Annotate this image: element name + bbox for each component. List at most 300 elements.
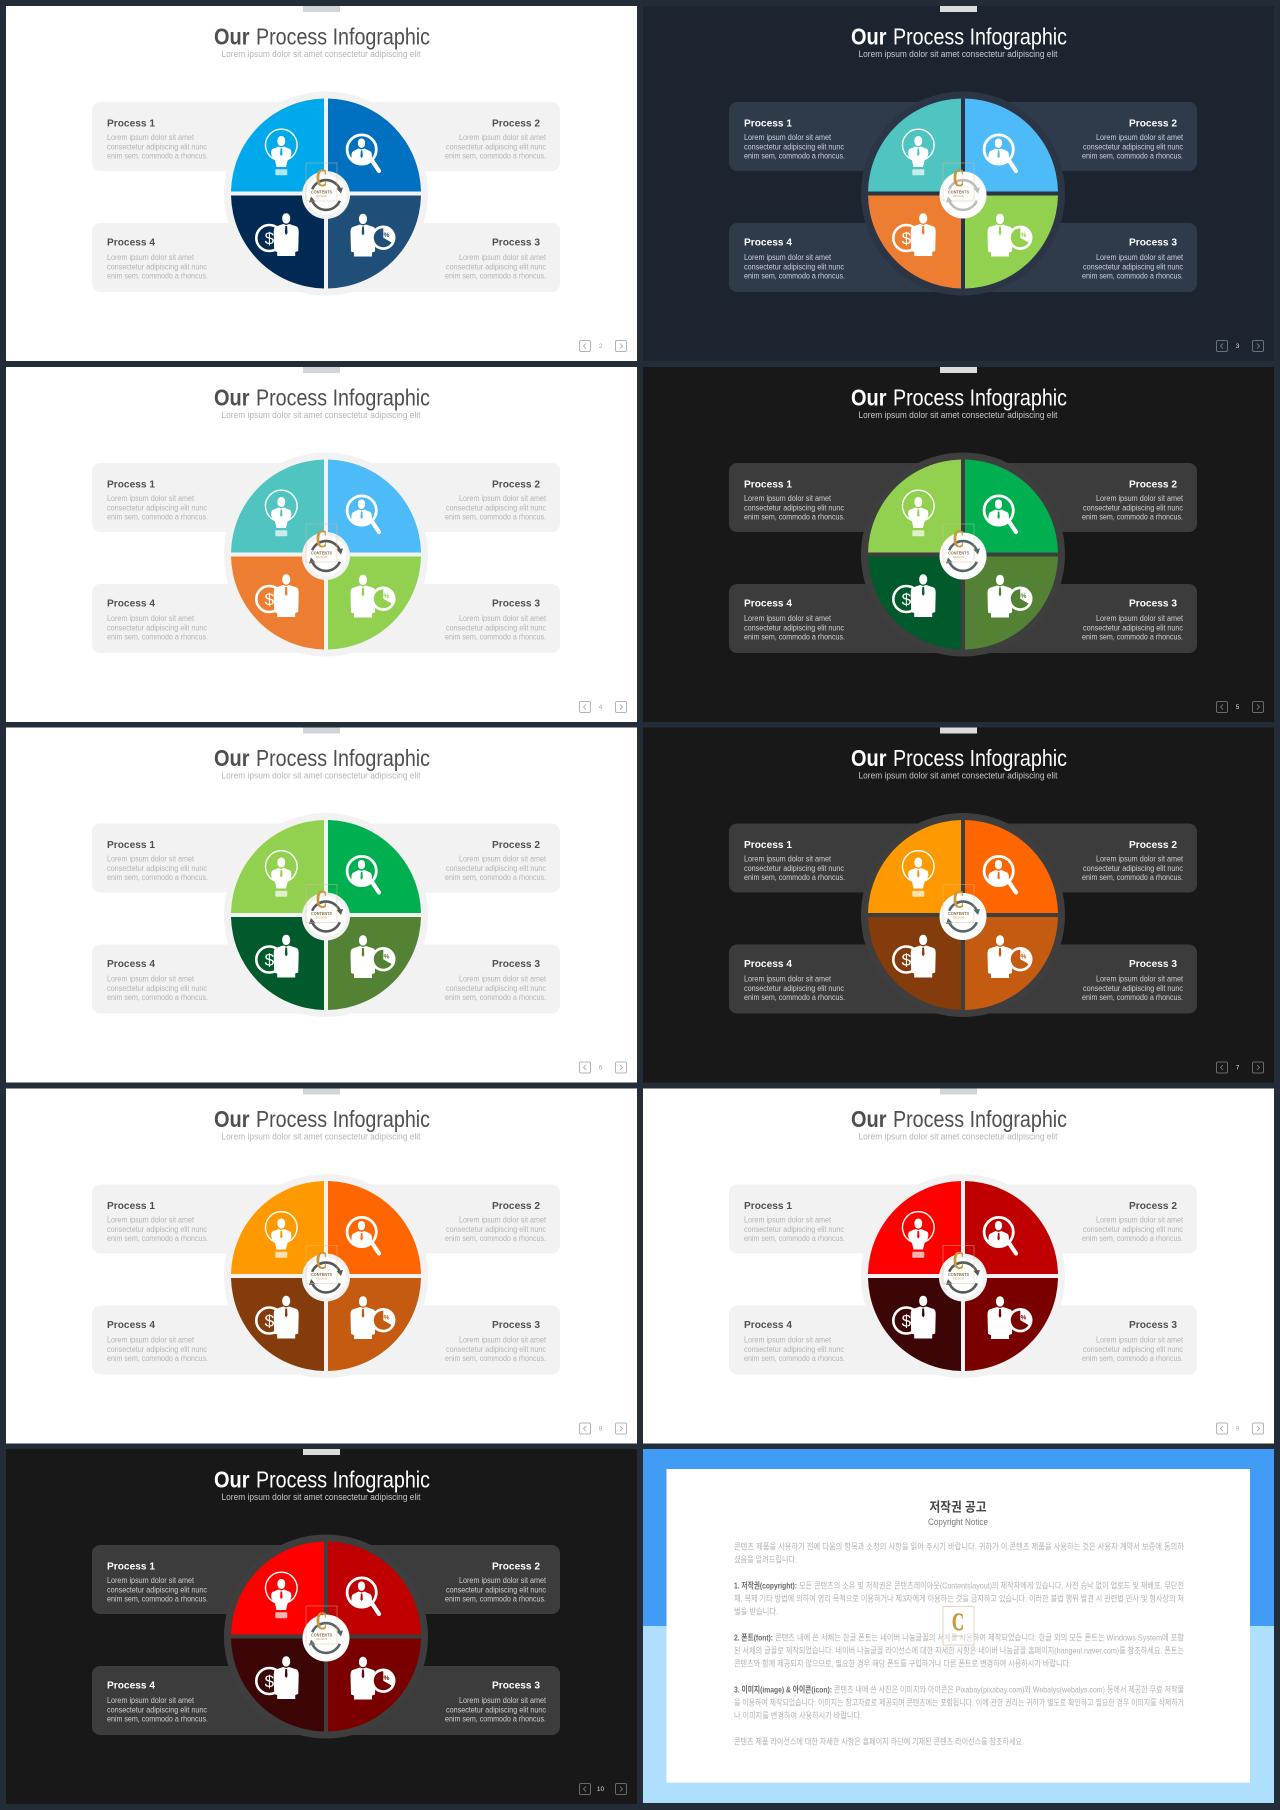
text block [744, 974, 845, 1002]
chart: four-quadrant process circle [224, 92, 428, 296]
watermark logo [943, 1606, 974, 1645]
text block: Lorem ipsum dolor sit amet [744, 854, 832, 864]
panel: Process 3 [326, 1306, 560, 1374]
text block: consectetur adipiscing elit nunc [446, 623, 546, 632]
quadrant 4 [231, 196, 324, 288]
text block [445, 494, 547, 522]
text block [1082, 1336, 1184, 1363]
chart: four-quadrant process circle [861, 452, 1065, 656]
quadrant 2 [328, 98, 421, 192]
paragraph 2: font: 콘텐츠와 함께 제공되지 않으므로, 필요한 경우 해당 폰트를 구입하거나 다른 폰트로 변경하여 사용하시기 바랍니다. [734, 1658, 1071, 1668]
text block: consectetur adipiscing elit nunc [107, 864, 207, 873]
watermark logo [943, 1246, 974, 1284]
panel: Process 1 [729, 824, 963, 892]
watermark logo: DESIGN [316, 555, 327, 559]
watermark logo: C [953, 165, 964, 192]
icon: person with percent pie: % [384, 593, 390, 600]
paragraph 3: images and icons: 을 이용하여 제작되었습니다. 이미지는 참고자료로 제공되며 콘텐츠에는 포함됩니다. 이에 관한 권리는 귀하가 별도로 확인하고 필요한 경우 이미지를 삭제하거 [734, 1698, 1184, 1708]
text block [107, 1696, 208, 1724]
text block: consectetur adipiscing elit nunc [744, 984, 844, 993]
closing line: 콘텐츠 제품 라이선스에 대한 자세한 사항은 홈페이지 하단에 기재된 콘텐츠 라이선스를 참조하세요. [734, 1737, 1024, 1747]
paragraph 1: copyright: 벌을 받습니다. [734, 1607, 778, 1617]
quadrant 3 [328, 1278, 421, 1371]
text block: consectetur adipiscing elit nunc [107, 1585, 207, 1594]
text block: Lorem ipsum dolor sit amet [1096, 854, 1184, 864]
navigation and page number [1216, 702, 1264, 712]
watermark logo: CONTENTS [948, 911, 969, 916]
heading: Process 4 [744, 236, 792, 248]
panel: Process 3 [963, 223, 1197, 292]
chart: four-quadrant process circle [224, 1174, 428, 1378]
quadrant 4 [231, 1638, 324, 1732]
navigation and page number [1216, 1062, 1264, 1073]
text block: consectetur adipiscing elit nunc [446, 1345, 546, 1354]
text block [1082, 253, 1184, 281]
text block: enim sem, commodo a rhoncus. [1082, 993, 1183, 1002]
icon: person in magnifier [984, 856, 1016, 892]
panel: Process 4 [729, 1306, 963, 1374]
top tab [940, 367, 977, 373]
text block: enim sem, commodo a rhoncus. [445, 1715, 546, 1724]
quadrant 2 [965, 1181, 1058, 1274]
icon: person with dollar coin: $ [265, 950, 275, 970]
quadrant 4 [868, 1278, 961, 1371]
text block: enim sem, commodo a rhoncus. [445, 993, 546, 1002]
center cycle hub [302, 532, 350, 580]
paragraph 3: images and icons: 콘텐츠 내에 쓴 사진은 이미지와 아이콘은 Pixabay(pixabay.com)와 Webalys(webalys.com) 등에서 제공한 무료 저작물 [834, 1684, 1184, 1694]
intro paragraph: 셨음을 알려드립니다. [734, 1554, 797, 1564]
panel: Process 4 [92, 223, 326, 292]
text block: enim sem, commodo a rhoncus. [107, 513, 208, 522]
slide background [643, 728, 1274, 1082]
title: Process Infographic [256, 1106, 430, 1132]
icon: person with percent pie [350, 214, 396, 256]
heading: Process 1 [107, 839, 155, 851]
text block: enim sem, commodo a rhoncus. [107, 1595, 208, 1604]
text block: Lorem ipsum dolor sit amet [1096, 1336, 1184, 1344]
paragraph 1: copyright: 1. 저작권(copyright): [734, 1581, 797, 1591]
panel: Process 1 [92, 463, 326, 532]
text block [744, 1216, 845, 1243]
text block [445, 1576, 547, 1604]
heading: Process 2 [1129, 118, 1177, 130]
text block: enim sem, commodo a rhoncus. [107, 272, 208, 281]
heading: Process 3 [1129, 236, 1177, 248]
icon: person with dollar coin: $ [265, 1672, 275, 1691]
panel: Process 2 [963, 824, 1197, 892]
center cycle hub [302, 1614, 350, 1662]
quadrant 2 [328, 1542, 421, 1634]
chart: four-quadrant process circle [861, 92, 1065, 296]
text block: Lorem ipsum dolor sit amet [107, 614, 195, 623]
heading: Process 3 [1129, 958, 1177, 970]
text block [107, 1336, 208, 1363]
watermark logo: DESIGN [953, 555, 964, 559]
text block: enim sem, commodo a rhoncus. [744, 1354, 845, 1363]
slide background [643, 6, 1274, 361]
text block [107, 854, 208, 882]
text block: Lorem ipsum dolor sit amet [1096, 133, 1184, 142]
panel: Process 4 [92, 584, 326, 653]
text block: enim sem, commodo a rhoncus. [1082, 1234, 1183, 1243]
text block: Lorem ipsum dolor sit amet [459, 494, 547, 503]
quadrant 1 [868, 1181, 961, 1274]
text block [1082, 974, 1184, 1002]
text block: consectetur adipiscing elit nunc [446, 864, 546, 873]
panel: Process 4 [92, 1306, 326, 1374]
paragraph 3: images and icons: 나 이미지를 변경하여 사용하시기 바랍니다. [734, 1710, 862, 1720]
text block: enim sem, commodo a rhoncus. [1082, 873, 1183, 882]
quadrant 4 [868, 556, 961, 650]
heading: Process 4 [744, 958, 792, 970]
text block: Lorem ipsum dolor sit amet [107, 1576, 195, 1585]
subtitle: Lorem ipsum dolor sit amet consectetur adipiscing elit [858, 49, 1058, 59]
center cycle hub [302, 1254, 350, 1302]
watermark logo [306, 524, 337, 562]
icon: person with percent pie: % [1021, 1314, 1027, 1322]
title: Our [851, 24, 887, 50]
slide 8: white, orange palette [6, 1088, 637, 1444]
title: Process Infographic [256, 1466, 430, 1492]
title: Process Infographic [893, 745, 1067, 771]
watermark logo: C [316, 1608, 327, 1635]
quadrant 2 [965, 98, 1058, 192]
watermark logo: CONTENTS [311, 550, 332, 556]
paragraph 3: images and icons [734, 1684, 1184, 1720]
panel: Process 1 [92, 824, 326, 892]
chart: four-quadrant process circle [224, 813, 428, 1017]
navigation and page number [580, 1423, 626, 1434]
text block: enim sem, commodo a rhoncus. [107, 1715, 208, 1724]
slide background [6, 1088, 637, 1444]
watermark logo: C [316, 886, 327, 914]
quadrant 1 [868, 460, 961, 552]
watermark logo [306, 884, 337, 922]
text block [744, 854, 845, 882]
text block: Lorem ipsum dolor sit amet [744, 614, 832, 623]
heading: Process 2 [1129, 1200, 1177, 1212]
quadrant 3 [328, 556, 421, 650]
navigation and page number: 6 [599, 1064, 603, 1072]
paragraph 2: font [734, 1633, 1184, 1668]
icon: person in magnifier [984, 496, 1016, 532]
text block: Lorem ipsum dolor sit amet [459, 253, 547, 262]
watermark logo: C [316, 526, 327, 553]
text block: consectetur adipiscing elit nunc [744, 1225, 844, 1234]
top tab [940, 6, 977, 12]
text block: Lorem ipsum dolor sit amet [107, 974, 195, 984]
panel: Process 4 [729, 223, 963, 292]
text block [445, 1696, 547, 1724]
panel: Process 1 [92, 1545, 326, 1614]
text block: consectetur adipiscing elit nunc [107, 262, 207, 271]
text block [1082, 133, 1184, 161]
text block: consectetur adipiscing elit nunc [107, 503, 207, 512]
blue upper background [643, 1449, 1274, 1626]
title: Our [214, 745, 250, 771]
heading: Process 1 [744, 478, 792, 490]
text block [744, 614, 845, 642]
icon: person with percent pie [988, 575, 1032, 618]
watermark logo [943, 524, 974, 562]
text block: enim sem, commodo a rhoncus. [445, 1234, 546, 1243]
intro paragraph [734, 1542, 1184, 1564]
watermark logo: DESIGN [953, 194, 964, 198]
watermark logo: DESIGN [953, 916, 964, 920]
icon: person with dollar coin: $ [902, 229, 912, 248]
text block: enim sem, commodo a rhoncus. [107, 993, 208, 1002]
heading: Process 4 [107, 1319, 155, 1331]
slide background [6, 6, 637, 361]
heading: Process 2 [492, 1560, 540, 1572]
panel: Process 3 [326, 1666, 560, 1735]
watermark logo [943, 163, 974, 201]
text block: Lorem ipsum dolor sit amet [459, 974, 547, 984]
icon: person with percent pie: % [384, 232, 390, 239]
title: Our [851, 745, 887, 771]
paragraph 1: copyright: 재, 복제 기타 방법에 의하여 영리 목적으로 이용하거나 제3자에게 이용하는 것을 금지하고 있습니다. 이러한 불법 행위 발견 시 관련법 민사 및 형사상의 처 [734, 1593, 1184, 1603]
text block: enim sem, commodo a rhoncus. [445, 633, 546, 642]
title: Our [214, 384, 250, 410]
title: Process Infographic [893, 384, 1067, 410]
panel: Process 1 [729, 463, 963, 532]
icon: person with percent pie: % [384, 1675, 390, 1682]
text block: enim sem, commodo a rhoncus. [107, 633, 208, 642]
text block: consectetur adipiscing elit nunc [107, 1345, 207, 1354]
slide 2: white, blue palette [6, 6, 637, 361]
quadrant 1 [231, 98, 324, 192]
panel: Process 1 [92, 102, 326, 171]
slide 6: white, green palette [6, 728, 637, 1082]
icon: person in magnifier [347, 856, 379, 892]
heading: Process 3 [492, 1319, 540, 1331]
heading: Process 2 [492, 478, 540, 490]
chart: four-quadrant process circle [861, 1174, 1065, 1378]
icon: person with percent pie: % [1021, 232, 1027, 239]
text block: consectetur adipiscing elit nunc [744, 1345, 844, 1354]
text block: enim sem, commodo a rhoncus. [445, 272, 546, 281]
icon: person in light bulb [902, 490, 934, 536]
text block [445, 253, 547, 281]
icon: person in magnifier [347, 1217, 379, 1254]
icon: person in light bulb [266, 851, 297, 897]
text block: enim sem, commodo a rhoncus. [744, 873, 845, 882]
quadrant 1 [868, 98, 961, 192]
quadrant 1 [231, 1181, 324, 1274]
panel: Process 3 [326, 944, 560, 1014]
quadrant 1 [231, 460, 324, 552]
quadrant 2 [328, 820, 421, 913]
text block [445, 614, 547, 642]
slide 9: white, red palette [643, 1088, 1274, 1444]
icon: person with percent pie: % [1021, 593, 1027, 600]
icon: person in light bulb [266, 1572, 297, 1618]
top tab [303, 367, 340, 373]
text block: Lorem ipsum dolor sit amet [459, 614, 547, 623]
panel: Process 2 [326, 824, 560, 892]
navigation and page number [580, 340, 626, 352]
text block: consectetur adipiscing elit nunc [1083, 1225, 1183, 1234]
slide 7: black, orange palette [643, 728, 1274, 1082]
title: Our [214, 1106, 250, 1132]
heading: Process 4 [744, 598, 792, 610]
text block: enim sem, commodo a rhoncus. [107, 1354, 208, 1363]
icon: person with dollar coin [256, 574, 299, 617]
text block: Lorem ipsum dolor sit amet [107, 494, 195, 503]
watermark logo: CONTENTS [948, 1272, 969, 1277]
text block: enim sem, commodo a rhoncus. [1082, 633, 1183, 642]
heading: Process 1 [744, 839, 792, 851]
text block: Lorem ipsum dolor sit amet [1096, 614, 1184, 623]
icon: person with dollar coin [893, 213, 936, 256]
subtitle: Lorem ipsum dolor sit amet consectetur adipiscing elit [858, 1132, 1058, 1142]
panel: Process 4 [92, 1666, 326, 1735]
heading: Process 4 [107, 598, 155, 610]
text block: Lorem ipsum dolor sit amet [459, 1216, 547, 1224]
text block: enim sem, commodo a rhoncus. [445, 873, 546, 882]
icon: person with percent pie [350, 1296, 396, 1339]
text block: enim sem, commodo a rhoncus. [744, 993, 845, 1002]
text block: enim sem, commodo a rhoncus. [744, 1234, 845, 1243]
title: Our [851, 384, 887, 410]
text block [744, 1336, 845, 1363]
text block: consectetur adipiscing elit nunc [446, 1705, 546, 1714]
watermark logo: CONTENTS [948, 190, 969, 194]
paragraph 3: images and icons: 3. 이미지(image) & 아이콘(icon): [734, 1684, 832, 1694]
chart: four-quadrant process circle [224, 452, 428, 656]
text block: enim sem, commodo a rhoncus. [107, 152, 208, 161]
subtitle: Lorem ipsum dolor sit amet consectetur adipiscing elit [222, 1132, 421, 1142]
panel: Process 3 [963, 1306, 1197, 1374]
text block: Lorem ipsum dolor sit amet [107, 133, 195, 142]
text block: consectetur adipiscing elit nunc [107, 1225, 207, 1234]
title: Process Infographic [893, 24, 1067, 50]
center cycle hub [302, 171, 350, 219]
icon: person with dollar coin: $ [265, 590, 275, 609]
title: Our [214, 24, 250, 50]
text block: Lorem ipsum dolor sit amet [459, 1336, 547, 1344]
text block [445, 974, 547, 1002]
center cycle hub [302, 892, 350, 940]
icon: person with percent pie: % [1021, 954, 1027, 960]
subtitle: Lorem ipsum dolor sit amet consectetur adipiscing elit [222, 410, 421, 420]
panel: Process 4 [729, 584, 963, 653]
text block: consectetur adipiscing elit nunc [744, 142, 844, 151]
text block: Lorem ipsum dolor sit amet [459, 1576, 547, 1585]
heading: Process 2 [492, 118, 540, 130]
text block: Lorem ipsum dolor sit amet [459, 1696, 547, 1705]
text block: enim sem, commodo a rhoncus. [107, 1234, 208, 1243]
title: Process Infographic [893, 1106, 1067, 1132]
icon: person with percent pie [988, 1296, 1032, 1339]
quadrant 3 [328, 917, 421, 1010]
title: Process Infographic [256, 24, 430, 50]
top tab [303, 728, 340, 734]
text block: Lorem ipsum dolor sit amet [107, 253, 195, 262]
watermark logo: DESIGN [953, 1276, 964, 1280]
icon: person in light bulb [902, 1212, 934, 1258]
icon: person in light bulb [266, 490, 297, 536]
heading: Process 2 [1129, 478, 1177, 490]
text block [1082, 1216, 1184, 1243]
watermark logo: DESIGN [953, 1634, 963, 1638]
top tab [303, 1088, 340, 1094]
paragraph 1: copyright [734, 1581, 1184, 1617]
text block: Lorem ipsum dolor sit amet [459, 133, 547, 142]
panel: Process 1 [729, 1184, 963, 1254]
slide 4: white, multicolor palette [6, 367, 637, 722]
quadrant 4 [868, 917, 961, 1010]
icon: person in light bulb [266, 1212, 297, 1258]
text block: consectetur adipiscing elit nunc [1083, 503, 1183, 512]
text block: enim sem, commodo a rhoncus. [445, 1354, 546, 1363]
icon: person in light bulb [902, 851, 934, 897]
text block [445, 1336, 547, 1363]
title: Our [214, 1466, 250, 1492]
watermark logo: CONTENTS [311, 1272, 332, 1277]
watermark logo: DESIGN [316, 1276, 327, 1280]
text block [445, 1216, 547, 1243]
text block: enim sem, commodo a rhoncus. [445, 1595, 546, 1604]
heading: Process 4 [107, 958, 155, 970]
heading: Process 4 [107, 1680, 155, 1692]
quadrant 3 [328, 196, 421, 288]
text block: consectetur adipiscing elit nunc [446, 1585, 546, 1594]
text block: consectetur adipiscing elit nunc [1083, 142, 1183, 151]
text block [1082, 494, 1184, 522]
notice subheading: Copyright Notice [928, 1517, 988, 1527]
text block: consectetur adipiscing elit nunc [446, 262, 546, 271]
panel: Process 4 [729, 944, 963, 1014]
text block: Lorem ipsum dolor sit amet [107, 854, 195, 864]
quadrant 3 [965, 917, 1058, 1010]
text block: enim sem, commodo a rhoncus. [1082, 1354, 1183, 1363]
navigation and page number: 2 [599, 343, 603, 350]
notice heading: 저작권 공고 [930, 1500, 987, 1514]
quadrant 3 [965, 556, 1058, 650]
navigation and page number [580, 702, 626, 712]
icon: person with percent pie: % [384, 954, 390, 960]
quadrant 3 [965, 196, 1058, 288]
text block: enim sem, commodo a rhoncus. [107, 873, 208, 882]
navigation and page number [580, 1062, 626, 1073]
text block: Lorem ipsum dolor sit amet [107, 1696, 195, 1705]
icon: person with percent pie [350, 935, 396, 978]
quadrant 1 [868, 820, 961, 913]
heading: Process 1 [744, 118, 792, 130]
text block: consectetur adipiscing elit nunc [1083, 984, 1183, 993]
navigation and page number: 5 [1236, 704, 1240, 711]
watermark logo: CONTENTS [311, 911, 332, 916]
icon: person with dollar coin: $ [265, 1312, 275, 1330]
navigation and page number: 8 [599, 1426, 603, 1432]
quadrant 2 [965, 460, 1058, 552]
watermark logo [943, 884, 974, 922]
icon: person with dollar coin [893, 574, 936, 617]
title: Our [851, 1106, 887, 1132]
paragraph 2: font: 2. 폰트(font): [734, 1633, 773, 1643]
text block: consectetur adipiscing elit nunc [107, 984, 207, 993]
heading: Process 2 [1129, 839, 1177, 851]
text block: Lorem ipsum dolor sit amet [107, 1216, 195, 1224]
text block [107, 253, 208, 281]
quadrant 3 [328, 1638, 421, 1732]
white notice panel [666, 1469, 1250, 1783]
text block: Lorem ipsum dolor sit amet [1096, 1216, 1184, 1224]
slide 10: black, red palette [6, 1449, 637, 1804]
icon: person with percent pie [350, 575, 396, 618]
subtitle: Lorem ipsum dolor sit amet consectetur adipiscing elit [858, 770, 1058, 780]
